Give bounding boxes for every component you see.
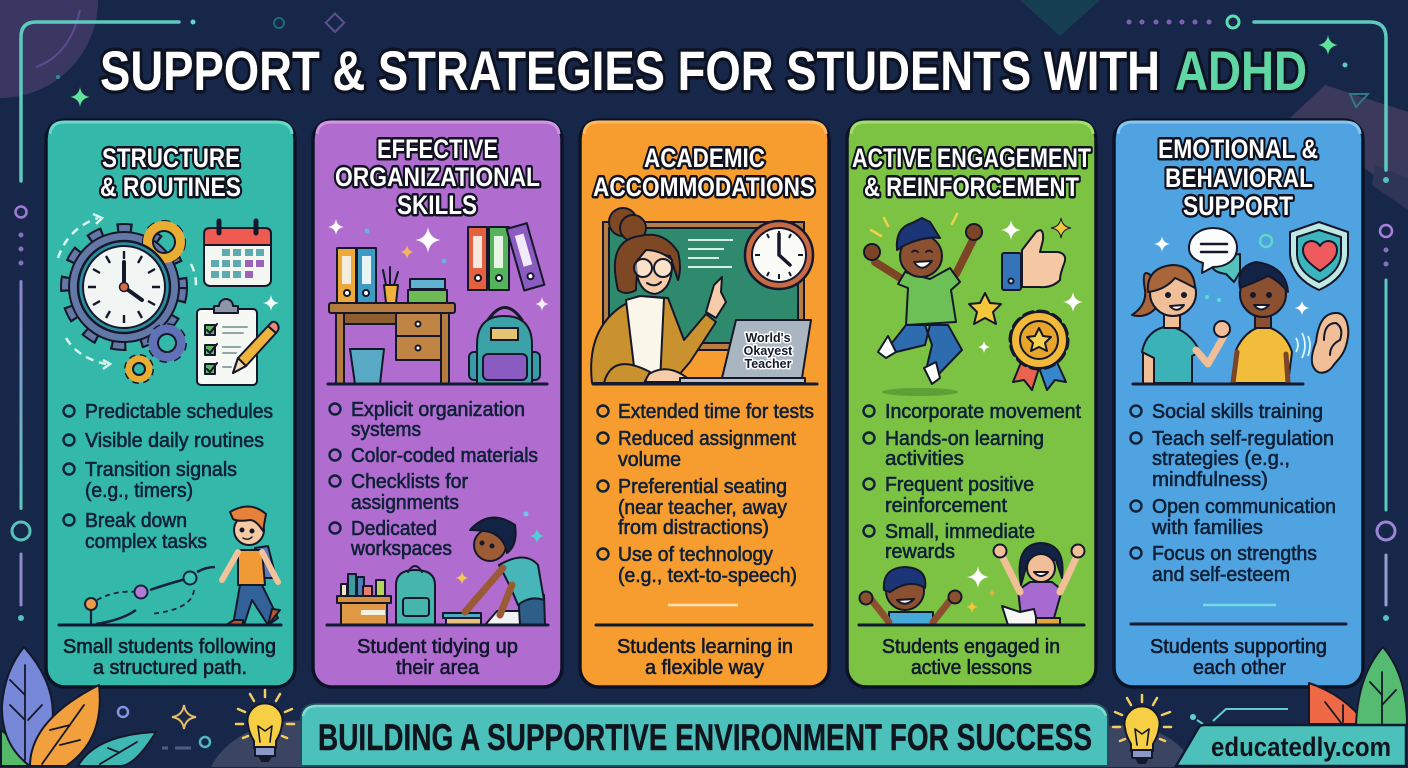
bullet list: Transition signals xyxy=(85,459,237,481)
heading: emotional and behavioral support: SUPPORT xyxy=(1183,191,1293,221)
icon: backpack xyxy=(469,308,540,384)
icon: sparkles xyxy=(328,219,549,311)
heading: structure and routines xyxy=(100,143,241,202)
ground line xyxy=(859,624,1084,626)
icon: medal xyxy=(1011,312,1067,390)
caption: Student tidying up xyxy=(357,636,518,658)
heading: academic accommodations: ACADEMIC xyxy=(644,143,765,173)
caption: Small students following xyxy=(63,636,276,658)
icon: light bulb left xyxy=(236,690,294,761)
bullet list: systems xyxy=(351,419,421,441)
frame: top left xyxy=(12,20,195,620)
leaves: bottom left xyxy=(1,647,156,766)
leaves: bottom right xyxy=(1309,647,1407,725)
icon: ear xyxy=(1312,313,1348,373)
panel: active engagement and reinforcement xyxy=(847,120,1096,687)
icon: speech bubbles xyxy=(1189,228,1240,282)
heading: effective organizational skills: ORGANIZATIONAL xyxy=(335,162,540,192)
bullet list: activities xyxy=(885,448,964,470)
bullet list: Preferential seating xyxy=(618,476,787,498)
bullet list: (near teacher, away xyxy=(618,497,787,519)
icon: checklist and pencil xyxy=(197,299,279,385)
icon: calendar xyxy=(204,221,271,286)
icon: thumbs up xyxy=(1002,230,1065,290)
caption: Students engaged in xyxy=(882,636,1060,658)
illustration: student following path xyxy=(85,506,280,625)
bullet list: Color-coded materials xyxy=(351,445,538,467)
bullet list: (e.g., text-to-speech) xyxy=(618,565,797,587)
bullet list: Break down xyxy=(85,510,187,532)
heading: effective organizational skills xyxy=(335,134,540,220)
illustration: student tidying up xyxy=(337,518,545,625)
heading: emotional and behavioral support xyxy=(1158,134,1318,221)
icon: sparkles xyxy=(456,512,544,584)
heading: academic accommodations: ACCOMMODATIONS xyxy=(593,172,815,202)
caption xyxy=(617,636,793,679)
bullet list: with families xyxy=(1151,517,1263,539)
illustration: jumping student xyxy=(864,214,982,396)
bullet list: Social skills training xyxy=(1152,401,1323,423)
bullet list xyxy=(864,401,1081,563)
bullet list: reinforcement xyxy=(885,495,1007,517)
heading: structure and routines: & ROUTINES xyxy=(100,172,241,202)
bullet list xyxy=(64,401,273,553)
ground line xyxy=(1131,622,1346,626)
banner: BUILDING A SUPPORTIVE ENVIRONMENT FOR SUCCESS xyxy=(318,717,1092,758)
heading: emotional and behavioral support: BEHAVIORAL xyxy=(1165,163,1313,193)
icon: laptop: World's xyxy=(745,331,791,345)
website tab: educatedly.com xyxy=(1211,732,1391,762)
icon: clock and gears xyxy=(58,214,196,380)
bullet list: Frequent positive xyxy=(885,474,1034,496)
caption xyxy=(357,636,518,679)
icon: laptop xyxy=(680,320,811,383)
bullet list: Predictable schedules xyxy=(85,401,273,423)
caption: a structured path. xyxy=(93,657,247,679)
caption xyxy=(63,636,276,679)
bullet list: Focus on strengths xyxy=(1152,543,1317,565)
bullet list: and self-esteem xyxy=(1152,564,1290,586)
bullet list: assignments xyxy=(351,492,459,514)
caption xyxy=(1150,636,1327,679)
heading: structure and routines: STRUCTURE xyxy=(102,143,240,173)
bullet list: Small, immediate xyxy=(885,521,1035,543)
bullet list: Open communication xyxy=(1152,496,1336,518)
panel: academic accommodations xyxy=(580,120,829,687)
panel: structure and routines xyxy=(46,120,295,687)
bullet list xyxy=(1130,401,1336,586)
bullet list: Visible daily routines xyxy=(85,430,264,452)
bullet list: (e.g., timers) xyxy=(85,480,193,502)
caption: a flexible way xyxy=(645,657,764,679)
illustration: students celebrating xyxy=(860,543,1084,625)
icon: shield with heart xyxy=(1290,222,1348,290)
caption: their area xyxy=(396,657,480,679)
bullet list: Use of technology xyxy=(618,544,773,566)
panel: effective organizational skills xyxy=(313,120,562,687)
caption: Students supporting xyxy=(1150,636,1327,658)
decoration: small shapes xyxy=(118,705,1288,748)
icon: laptop: Teacher xyxy=(744,357,792,371)
frame: top right xyxy=(1126,16,1395,620)
icon: sparkles xyxy=(966,566,996,613)
icon: binders xyxy=(468,223,544,291)
caption: active lessons xyxy=(911,657,1032,679)
icon: wall clock xyxy=(745,221,813,289)
heading: effective organizational skills: EFFECTIVE xyxy=(377,134,498,164)
icon: desk with binders xyxy=(329,248,455,384)
bullet list: Extended time for tests xyxy=(618,401,814,423)
panel: emotional and behavioral support xyxy=(1114,120,1363,687)
bullet list: volume xyxy=(618,449,681,471)
bullet list: from distractions) xyxy=(618,517,769,539)
bullet list: Dedicated xyxy=(351,518,437,540)
bullet list: complex tasks xyxy=(85,531,207,553)
bullet list: rewards xyxy=(885,541,955,563)
heading: active engagement and reinforcement xyxy=(852,143,1091,202)
caption xyxy=(882,636,1060,679)
heading: academic accommodations xyxy=(593,143,815,202)
bullet list xyxy=(330,399,538,560)
ground line xyxy=(59,624,281,626)
caption: each other xyxy=(1193,657,1286,679)
bullet list: Reduced assignment xyxy=(618,428,796,450)
bullet list: Checklists for xyxy=(351,471,468,493)
ground line xyxy=(596,624,812,626)
heading: active engagement and reinforcement: ACTIVE ENGAGEMENT xyxy=(852,143,1091,173)
bullet list xyxy=(598,401,814,587)
bullet list: mindfulness) xyxy=(1152,469,1268,491)
ground line xyxy=(1133,382,1303,386)
icon: sparkles xyxy=(1154,235,1310,316)
bullet list: Hands-on learning xyxy=(885,428,1044,450)
website tab xyxy=(1176,725,1406,766)
icon: light bulb right xyxy=(1113,695,1171,763)
bullet list: strategies (e.g., xyxy=(1152,448,1290,470)
heading: active engagement and reinforcement: & REINFORCEMENT xyxy=(864,172,1079,202)
ground line xyxy=(328,382,547,386)
illustration: teacher at chalkboard xyxy=(591,208,813,383)
banner xyxy=(301,704,1108,766)
ground line xyxy=(593,382,817,386)
icon: sparkle xyxy=(263,295,279,311)
bullet list: workspaces xyxy=(350,538,452,560)
icon: green sparkles xyxy=(70,35,1338,107)
caption: Students learning in xyxy=(617,636,793,658)
illustration: girl and boy talking xyxy=(1132,262,1292,384)
bullet list: Explicit organization xyxy=(351,399,525,421)
ground line xyxy=(327,624,548,626)
icon: laptop: Okayest xyxy=(744,344,793,358)
bullet list: Teach self-regulation xyxy=(1152,428,1334,450)
bullet list: Incorporate movement xyxy=(885,401,1081,423)
icon: star xyxy=(969,293,1001,324)
title: ADHD xyxy=(1175,39,1307,102)
heading: emotional and behavioral support: EMOTIONAL & xyxy=(1158,134,1318,164)
title: SUPPORT & STRATEGIES FOR STUDENTS WITH xyxy=(100,39,1160,102)
heading: effective organizational skills: SKILLS xyxy=(397,190,477,220)
icon: sparkles xyxy=(978,218,1083,353)
